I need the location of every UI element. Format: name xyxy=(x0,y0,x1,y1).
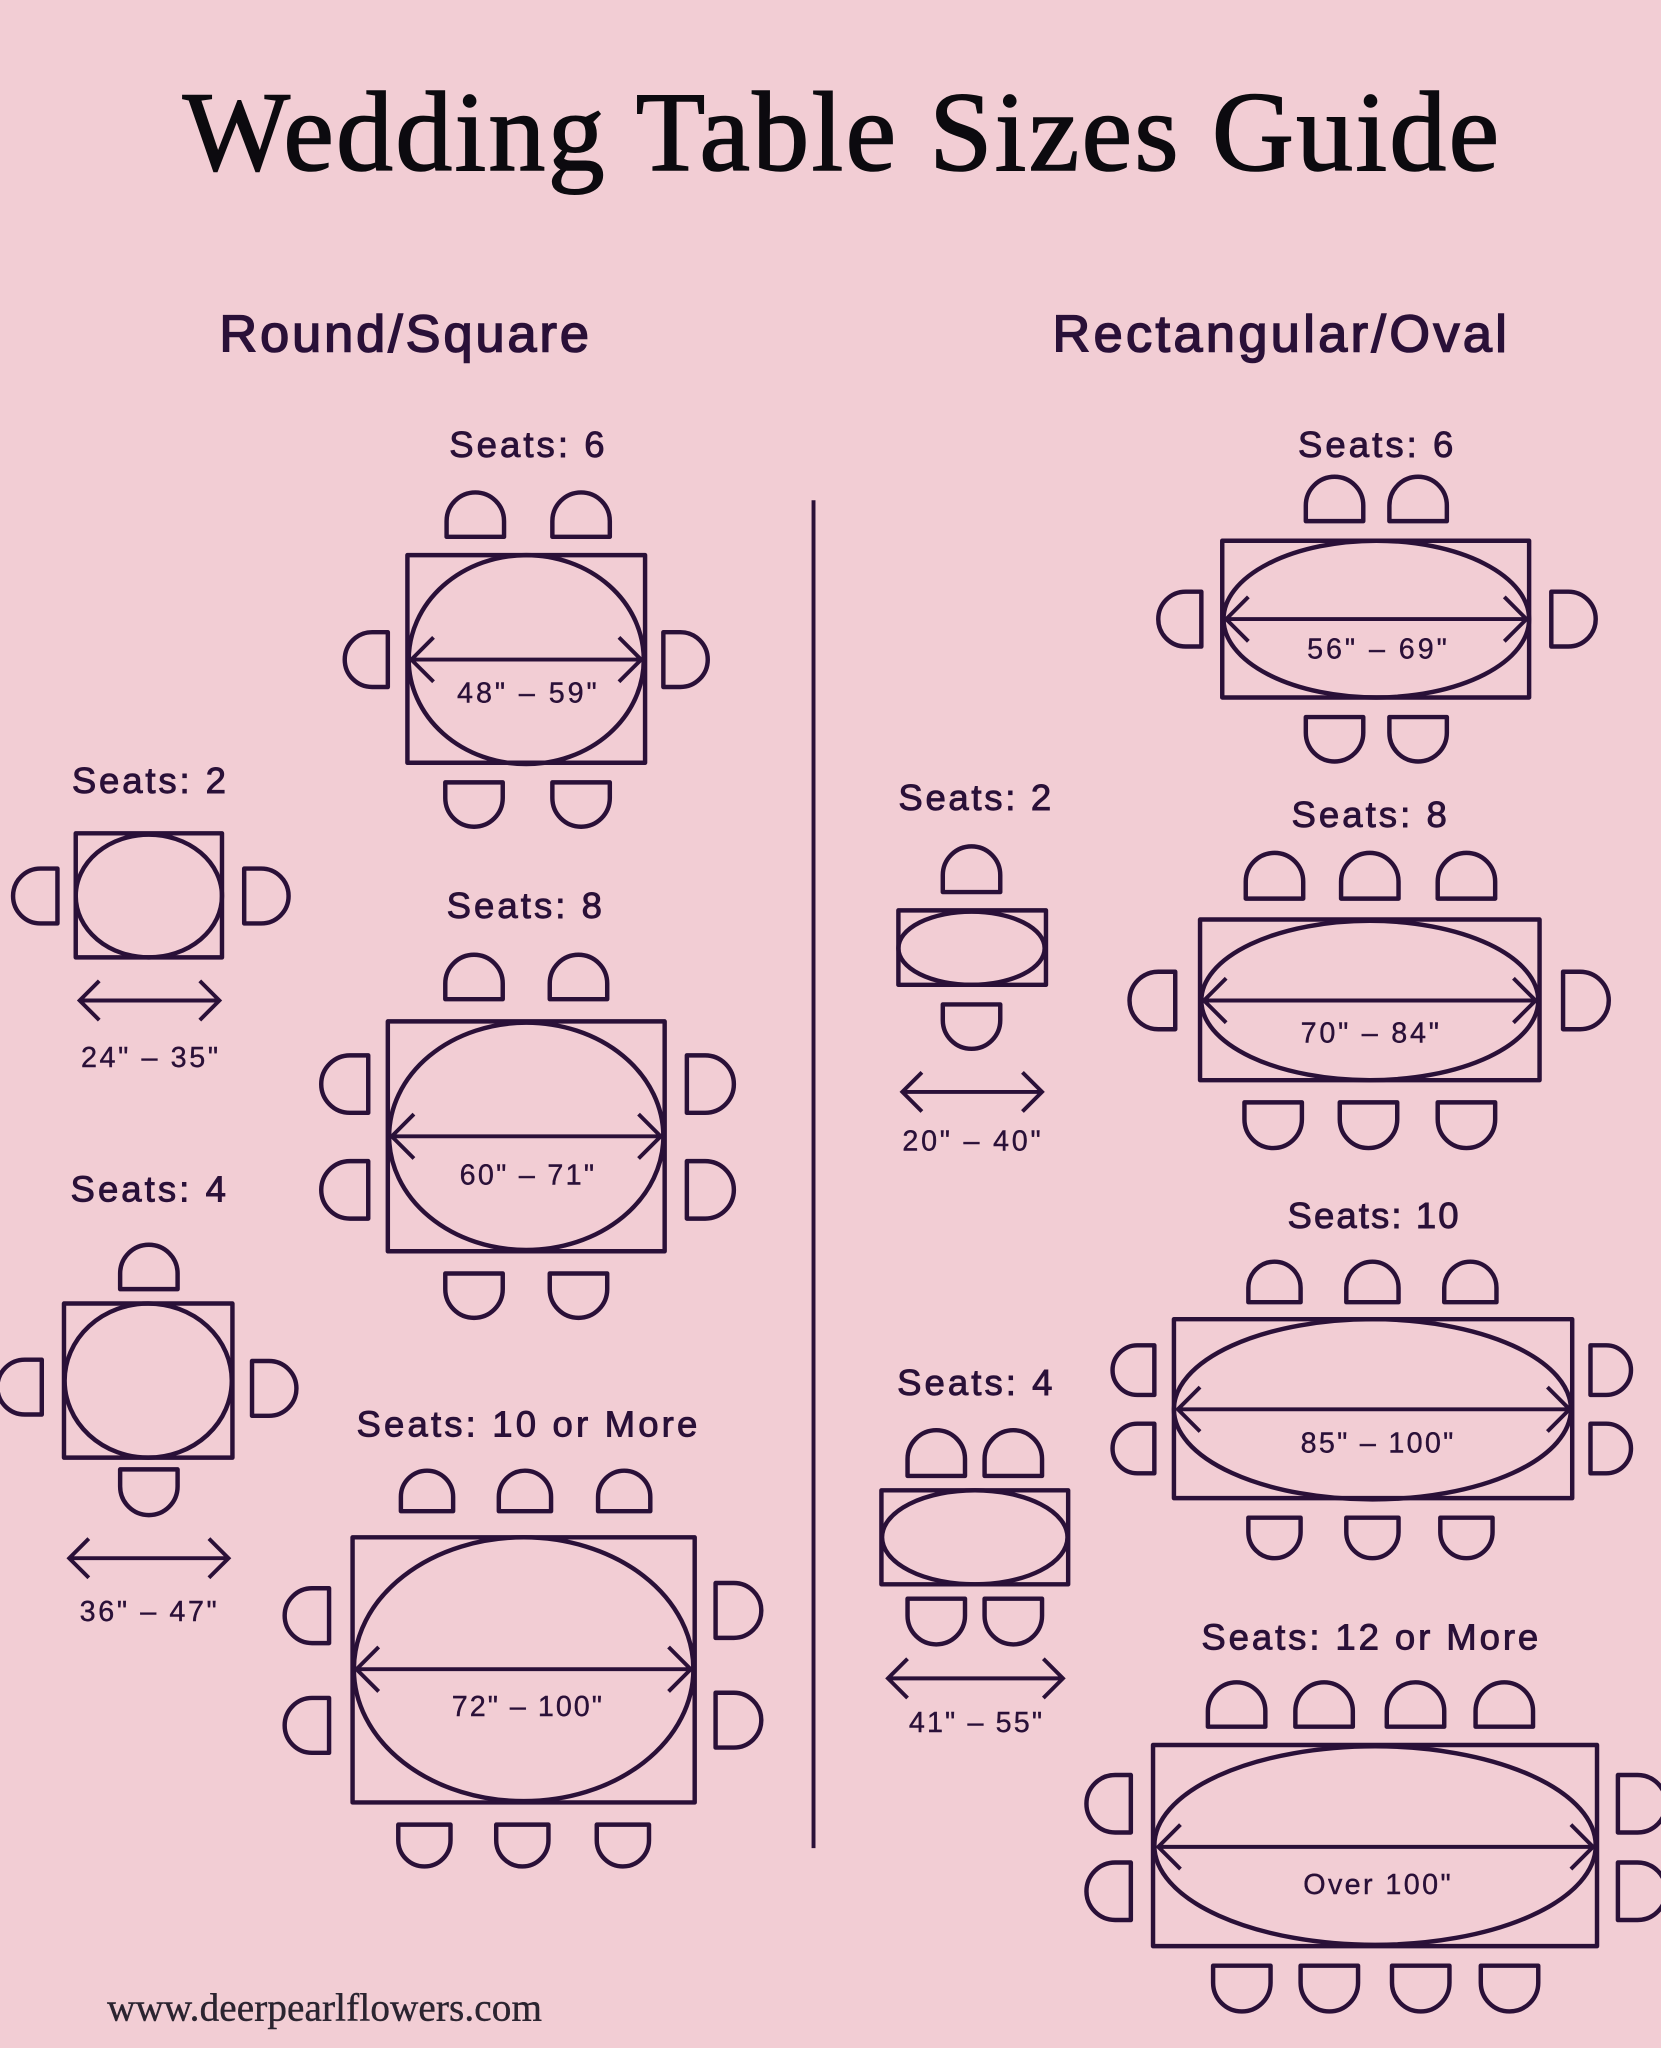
size label: 72" – 100" xyxy=(452,1691,602,1723)
table: square with circle xyxy=(407,555,645,764)
chairs xyxy=(321,955,734,1318)
footer: website: www.deerpearlflowers.com xyxy=(107,1987,542,2030)
chairs xyxy=(908,1430,1042,1644)
size label: 70" – 84" xyxy=(1301,1017,1439,1049)
arrow xyxy=(1178,1387,1570,1432)
table: rectangle with oval xyxy=(898,910,1046,985)
arrow xyxy=(1226,597,1527,641)
panel: rectangular seats 12 or more xyxy=(1086,1617,1661,2011)
panel: rectangular seats 4 xyxy=(881,1362,1068,1739)
table: square with circle xyxy=(76,833,222,957)
label: seats 6: Seats: 6 xyxy=(1298,424,1453,465)
chairs xyxy=(285,1471,761,1866)
size label: 60" – 71" xyxy=(460,1160,594,1192)
chairs xyxy=(13,869,289,923)
label: seats 2: Seats: 2 xyxy=(898,777,1051,818)
size label: 20" – 40" xyxy=(902,1126,1041,1158)
panel: rectangular seats 2 xyxy=(898,777,1051,1158)
arrow xyxy=(1158,1825,1593,1869)
label: seats 4: Seats: 4 xyxy=(897,1362,1052,1403)
label: seats 2: Seats: 2 xyxy=(72,760,226,801)
size label: 24" – 35" xyxy=(81,1042,218,1074)
panel: rectangular seats 6 xyxy=(1158,424,1596,761)
arrow xyxy=(902,1072,1042,1112)
size label: Over 100" xyxy=(1303,1869,1451,1901)
table: rectangle with oval xyxy=(1222,541,1529,697)
chairs xyxy=(943,846,1000,1049)
chairs xyxy=(1158,477,1596,761)
panel: round seats 6 xyxy=(345,424,708,827)
chairs xyxy=(1130,853,1609,1148)
panel: rectangular seats 10 xyxy=(1113,1195,1631,1558)
label: seats 10: Seats: 10 xyxy=(1288,1195,1459,1236)
arrow xyxy=(888,1659,1063,1698)
table: square with circle xyxy=(353,1537,695,1802)
arrow xyxy=(1204,978,1536,1023)
size label: 36" – 47" xyxy=(80,1596,217,1628)
title: Wedding Table Sizes Guide xyxy=(183,69,1499,195)
chairs xyxy=(345,492,708,827)
table: square with circle xyxy=(64,1304,232,1458)
arrow xyxy=(392,1114,661,1159)
chairs xyxy=(0,1245,296,1515)
panel: round seats 4 xyxy=(0,1169,296,1628)
table: rectangle with oval xyxy=(1153,1745,1597,1946)
size label: 56" – 69" xyxy=(1307,633,1447,665)
panel: round seats 8 xyxy=(321,885,734,1318)
table: rectangle with oval xyxy=(1200,920,1540,1080)
table: rectangle with oval xyxy=(1174,1319,1572,1499)
table: square with circle xyxy=(388,1021,665,1251)
panel: rectangular seats 8 xyxy=(1130,794,1609,1148)
panel: round seats 2 xyxy=(13,760,289,1074)
arrow xyxy=(356,1647,691,1691)
arrow xyxy=(80,981,219,1020)
label: seats 8: Seats: 8 xyxy=(1291,794,1447,835)
panel: round seats 10 or more xyxy=(285,1404,761,1866)
label: seats 10 or more: Seats: 10 or More xyxy=(356,1404,697,1445)
heading: rectangular/oval: Rectangular/Oval xyxy=(1052,305,1507,363)
size label: 41" – 55" xyxy=(909,1707,1042,1739)
label: seats 8: Seats: 8 xyxy=(447,885,602,926)
size label: 48" – 59" xyxy=(457,678,597,710)
size label: 85" – 100" xyxy=(1301,1427,1453,1459)
arrow xyxy=(69,1539,229,1578)
table: rectangle with oval xyxy=(881,1490,1068,1584)
chairs xyxy=(1113,1262,1631,1558)
label: seats 12 or more: Seats: 12 or More xyxy=(1201,1617,1538,1658)
label: seats 6: Seats: 6 xyxy=(449,424,605,465)
arrow xyxy=(411,637,641,682)
label: seats 4: Seats: 4 xyxy=(71,1169,226,1210)
chairs xyxy=(1086,1682,1661,2011)
heading: round/square: Round/Square xyxy=(219,305,589,363)
